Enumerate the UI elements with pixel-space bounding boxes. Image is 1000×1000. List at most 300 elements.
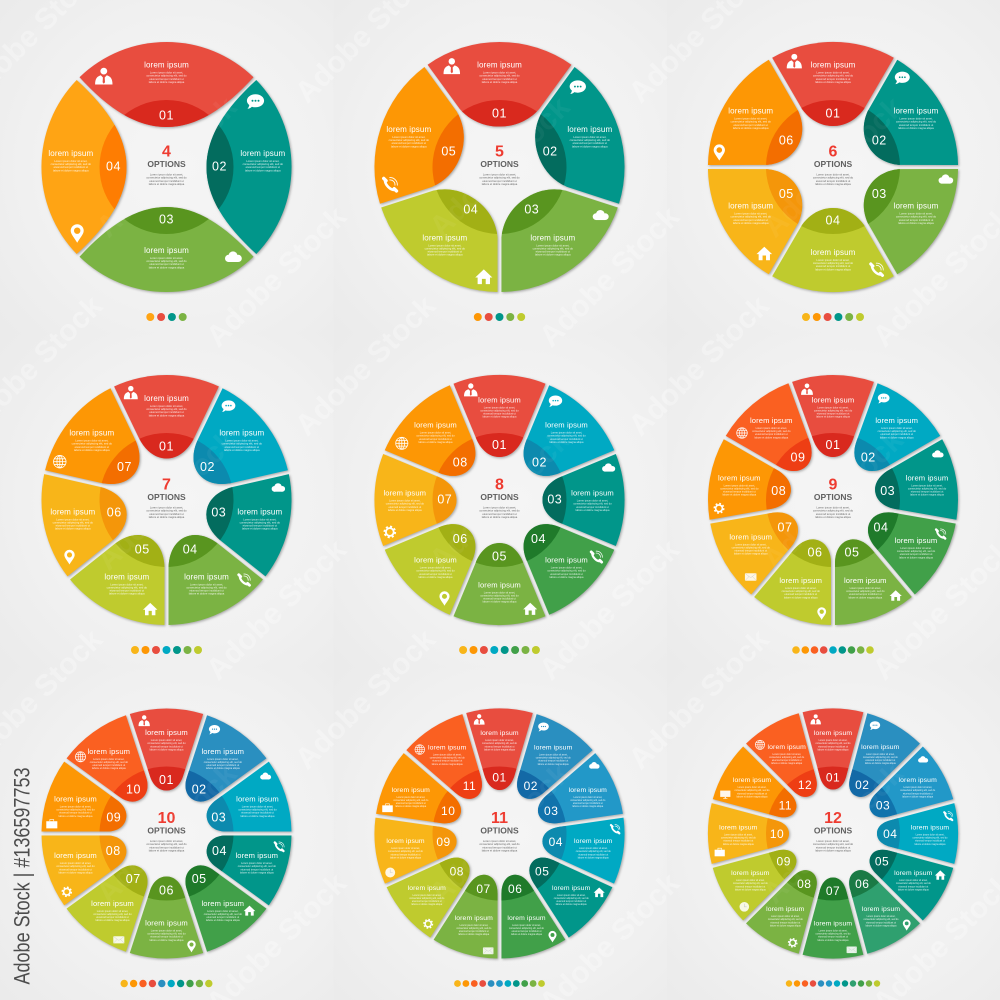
segment 02: consectetur adipiscing elit, sed do [570,138,610,142]
icon: cloud [272,483,285,492]
center heading [479,144,520,186]
segment 02: labore et dolore magna aliqua [880,435,914,439]
center heading: labore et dolore magna aliqua [149,182,185,186]
segment 05: lorem ipsum [552,885,591,892]
segment 11: consectetur adipiscing elit, sed do [430,757,465,760]
segment 06: Lorem ipsum dolor sit amet, [151,928,182,932]
segment 11: consectetur adipiscing elit, sed do [735,789,770,792]
center heading: eiusmod tempor incididunt ut [816,179,850,183]
panel: 12 options [708,708,958,987]
segment 04: lorem ipsum [911,824,949,832]
segment 07: lorem ipsum [69,429,114,438]
segment 04 [381,188,500,294]
segment 05: eiusmod tempor incididunt ut [207,915,239,919]
segment 03: 03 [524,203,539,217]
segment 01 [428,42,571,126]
icon: chat [549,396,562,407]
icon: user [124,386,138,399]
segment 09: consectetur adipiscing elit, sed do [56,808,95,812]
segment 02: 02 [532,455,547,469]
panel: 8 options [374,375,625,654]
segment 05: labore et dolore magna aliqua [848,595,883,599]
segment 02: labore et dolore magna aliqua [572,144,608,148]
segment 05: eiusmod tempor incididunt ut [483,597,516,601]
segment 07: labore et dolore magna aliqua [734,552,768,556]
segment 04: Lorem ipsum dolor sit amet, [916,834,945,836]
segment 04: labore et dolore magna aliqua [240,870,274,874]
segment 01: Lorem ipsum dolor sit amet, [485,739,514,742]
segment 01: labore et dolore magna aliqua [816,415,850,419]
segment 09: 09 [777,854,791,868]
segment 05: labore et dolore magna aliqua [556,903,587,906]
segment 04: lorem ipsum [545,556,588,565]
icon: home [143,603,157,615]
segment 01 [803,708,863,790]
icon: chat [247,94,264,109]
segment 09: Lorem ipsum dolor sit amet, [60,804,91,808]
segment 01: labore et dolore magna aliqua [484,748,516,751]
segment 03: labore et dolore magna aliqua [149,265,185,269]
segment 12 [744,710,837,811]
icon: gear [62,887,71,896]
segment 07: 07 [117,460,132,474]
icon: cloud [932,450,944,457]
segment 02: consectetur adipiscing elit, sed do [863,756,898,759]
segment 04: consectetur adipiscing elit, sed do [913,837,948,840]
icon: user [95,68,112,84]
segment 05: consectetur adipiscing elit, sed do [554,897,589,900]
segment 11: eiusmod tempor incididunt ut [737,792,767,795]
center heading [146,810,187,853]
segment 07: 07 [778,520,792,534]
segment 03: 03 [211,810,226,824]
segment 09: consectetur adipiscing elit, sed do [752,429,791,433]
segment 08: Lorem ipsum dolor sit amet, [724,483,755,487]
segment 02: labore et dolore magna aliqua [206,766,240,770]
segment 01: Lorem ipsum dolor sit amet, [817,405,849,409]
segment 01: 01 [492,770,507,784]
segment 05: lorem ipsum [478,580,521,589]
icon: user [787,54,802,68]
segment 09 [710,829,810,922]
segment 07: lorem ipsum [91,899,134,908]
segment 03: labore et dolore magna aliqua [572,805,604,808]
panel: 11 options [371,708,628,987]
icon: home [475,269,492,284]
center heading: eiusmod tempor incididunt ut [149,179,184,183]
segment 06 [130,876,203,959]
icon: phone [384,178,397,191]
segment 01: consectetur adipiscing elit, sed do [146,74,187,78]
segment 07: lorem ipsum [729,532,772,541]
segment 02: lorem ipsum [875,416,918,425]
segment 06: labore et dolore magna aliqua [419,575,453,579]
segment 04 [523,524,616,616]
segment 05: eiusmod tempor incididunt ut [898,885,929,888]
icon: pin [548,931,557,942]
legend dots [474,313,525,321]
segment 04: Lorem ipsum dolor sit amet, [190,582,223,586]
segment 06: 06 [453,532,468,546]
segment 04: Lorem ipsum dolor sit amet, [241,861,273,865]
segment 04: eiusmod tempor incididunt ut [189,589,224,593]
segment 06 [41,474,129,578]
segment 08: lorem ipsum [414,421,457,430]
segment 06: labore et dolore magna aliqua [511,933,543,936]
watermark background: Adobe Stock [623,289,776,442]
center heading: Lorem ipsum dolor sit amet, [150,839,183,843]
segment 06: eiusmod tempor incididunt ut [56,524,90,528]
segment 05: Lorem ipsum dolor sit amet, [850,586,881,590]
segment 02: labore et dolore magna aliqua [224,448,260,452]
segment 01: Lorem ipsum dolor sit amet, [150,404,183,408]
icon: user [464,383,478,396]
panel: 9 options [703,375,963,654]
segment 08 [36,812,137,907]
segment 03 [525,751,627,846]
icon: cloud [939,174,953,184]
segment 01: eiusmod tempor incididunt ut [149,410,184,414]
segment 01 [114,375,219,458]
icon: chat [570,80,586,94]
icon: chat [222,400,235,412]
segment 04: Lorem ipsum dolor sit amet, [54,159,88,163]
segment 01 [454,375,546,457]
segment 02: Lorem ipsum dolor sit amet, [246,159,280,163]
segment 10: 10 [770,827,784,841]
segment 01: consectetur adipiscing elit, sed do [479,74,520,78]
icon: pin [714,144,725,161]
segment 03: lorem ipsum [236,794,279,804]
segment 04: consectetur adipiscing elit, sed do [238,864,276,868]
segment 11: lorem ipsum [733,777,771,784]
segment 06: Lorem ipsum dolor sit amet, [512,924,541,927]
center heading: Lorem ipsum dolor sit amet, [816,506,850,510]
icon: phone [591,551,602,562]
segment 04: lorem ipsum [184,572,229,581]
segment 10 [63,711,171,820]
segment 08: consectetur adipiscing elit, sed do [416,434,455,438]
icon: pin [817,607,826,620]
center heading [146,144,187,186]
segment 07: 07 [126,872,141,886]
segment 02: lorem ipsum [894,107,939,116]
segment 01: Lorem ipsum dolor sit amet, [819,739,848,742]
segment 03: 03 [544,804,558,818]
center heading: 5 [495,144,504,161]
segment 05: labore et dolore magna aliqua [733,221,769,225]
segment 03: labore et dolore magna aliqua [576,508,610,512]
segment 04: labore et dolore magna aliqua [915,843,946,846]
segment 12: labore et dolore magna aliqua [771,762,803,765]
segment 08: 08 [450,864,464,878]
segment 03: 03 [211,505,226,519]
segment 07: eiusmod tempor incididunt ut [734,548,767,552]
segment 07: Lorem ipsum dolor sit amet, [735,542,767,546]
segment 02 [523,385,616,478]
legend dots [146,313,187,321]
segment 03: lorem ipsum [894,202,939,211]
center heading: Lorem ipsum dolor sit amet, [483,172,516,176]
segment 08: labore et dolore magna aliqua [59,870,93,874]
segment 12: lorem ipsum [768,744,806,751]
segment 09: lorem ipsum [750,416,793,425]
icon: phone [871,263,883,275]
watermark overlay: Adobe Stock [757,757,910,910]
segment 07: lorem ipsum [455,915,493,922]
watermark background: Adobe Stock [200,533,353,686]
segment 08: 08 [106,844,121,858]
icon: cloud [260,773,271,779]
segment 06 [384,524,478,616]
segment 05: consectetur adipiscing elit, sed do [480,593,519,597]
center heading: labore et dolore magna aliqua [482,515,518,519]
watermark overlay: Adobe Stock [757,424,910,577]
segment 11: Lorem ipsum dolor sit amet, [738,786,767,789]
segment 07: consectetur adipiscing elit, sed do [386,502,424,506]
segment 04: eiusmod tempor incididunt ut [900,552,933,556]
segment 07: labore et dolore magna aliqua [818,939,849,942]
segment 09 [721,378,837,493]
segment 08: 08 [797,877,811,891]
center heading: consectetur adipiscing elit, sed do [813,176,854,180]
segment 10: 10 [126,782,141,796]
segment 04: 04 [874,520,888,534]
segment 02: Lorem ipsum dolor sit amet, [866,753,895,756]
segment 03: consectetur adipiscing elit, sed do [570,799,606,802]
segment 01: Lorem ipsum dolor sit amet, [816,71,850,75]
icon: home [890,590,902,601]
segment 05 [70,534,167,628]
segment 09: labore et dolore magna aliqua [754,435,789,439]
segment 03: consectetur adipiscing elit, sed do [908,486,947,490]
center heading: 12 [824,810,842,827]
segment 06: 06 [855,877,869,891]
segment 05 [511,837,616,941]
segment 02: Lorem ipsum dolor sit amet, [207,757,239,761]
segment 04: eiusmod tempor incididunt ut [578,853,608,856]
segment 01: 01 [159,108,174,122]
segment 09 [36,760,137,855]
segment 07: eiusmod tempor incididunt ut [389,505,421,509]
segment 02: eiusmod tempor incididunt ut [899,123,933,127]
segment 05: 05 [845,546,859,560]
segment 05: labore et dolore magna aliqua [483,600,517,604]
center heading: eiusmod tempor incididunt ut [816,512,850,516]
center heading: consectetur adipiscing elit, sed do [813,509,854,513]
segment 11 [404,710,504,815]
segment 03: lorem ipsum [144,246,189,255]
segment 02: lorem ipsum [240,149,285,158]
segment 09: lorem ipsum [731,870,770,877]
center heading: OPTIONS [480,159,519,169]
segment 10: eiusmod tempor incididunt ut [396,802,426,805]
segment 04: eiusmod tempor incididunt ut [550,572,583,576]
segment 07: labore et dolore magna aliqua [388,508,422,512]
segment 02: 02 [192,782,207,796]
segment 03: lorem ipsum [899,777,937,784]
segment 01: lorem ipsum [812,395,854,404]
icon: phone [611,825,620,833]
segment 02: 02 [200,460,215,474]
segment 05: 05 [192,872,207,886]
icon: chat [209,725,220,734]
segment 04 [168,534,264,628]
center heading: 10 [158,810,176,827]
segment 07: Lorem ipsum dolor sit amet, [819,930,848,932]
segment 02: consectetur adipiscing elit, sed do [204,760,242,764]
center heading: Lorem ipsum dolor sit amet, [483,506,516,510]
segment 02: labore et dolore magna aliqua [245,168,281,172]
segment 08: Lorem ipsum dolor sit amet, [771,915,800,918]
center heading: labore et dolore magna aliqua [815,515,851,519]
segment 03: consectetur adipiscing elit, sed do [240,520,280,524]
icon: clock [740,902,749,912]
watermark background: Adobe Stock [289,289,442,442]
segment 07: eiusmod tempor incididunt ut [818,936,848,939]
segment 05 [374,67,466,206]
segment 02: lorem ipsum [567,125,612,134]
center heading: OPTIONS [814,492,852,502]
segment 02 [829,710,922,811]
segment 03: 03 [872,187,887,201]
segment 05: lorem ipsum [894,870,933,877]
segment 03: Lorem ipsum dolor sit amet, [150,256,183,260]
icon: phone [239,574,250,585]
segment 01: 01 [159,440,174,454]
center heading: OPTIONS [147,159,186,169]
segment 01: labore et dolore magna aliqua [483,415,517,419]
segment 04: labore et dolore magna aliqua [427,253,463,257]
segment 08: lorem ipsum [718,473,761,482]
segment 01: labore et dolore magna aliqua [482,80,518,84]
segment 07 [374,454,456,546]
segment 03: Lorem ipsum dolor sit amet, [242,804,273,808]
center heading: Lorem ipsum dolor sit amet, [816,839,850,843]
segment 04: Lorem ipsum dolor sit amet, [551,566,582,570]
icon: gear [788,939,797,947]
segment 03: consectetur adipiscing elit, sed do [900,789,936,792]
segment 07: Lorem ipsum dolor sit amet, [75,439,109,443]
segment 06: consectetur adipiscing elit, sed do [416,569,455,573]
icon: home [244,906,255,916]
icon: globe [75,752,86,762]
center heading: consectetur adipiscing elit, sed do [479,509,520,513]
segment 07: eiusmod tempor incididunt ut [75,445,109,449]
segment 08: lorem ipsum [408,885,446,892]
segment 06: lorem ipsum [728,107,773,116]
icon: mail [847,946,857,953]
center heading: eiusmod tempor incididunt ut [482,179,517,183]
segment 11: Lorem ipsum dolor sit amet, [433,754,462,756]
watermark background: Adobe Stock [200,200,353,353]
segment 04: Lorem ipsum dolor sit amet, [900,546,932,550]
segment 05: lorem ipsum [104,572,149,581]
segment 02: labore et dolore magna aliqua [550,440,584,444]
segment 06: consectetur adipiscing elit, sed do [864,918,899,921]
icon: home [594,888,605,897]
segment 05: lorem ipsum [386,125,431,134]
segment 08: Lorem ipsum dolor sit amet, [60,861,91,865]
segment 03 [501,188,620,294]
segment 01: 01 [826,438,840,452]
center heading: labore et dolore magna aliqua [482,849,518,853]
segment 04 [772,208,894,292]
segment 07: consectetur adipiscing elit, sed do [72,442,112,446]
icon: globe [53,455,66,468]
segment 09: consectetur adipiscing elit, sed do [733,882,768,885]
icon: chat [870,721,880,730]
segment 08 [703,438,798,533]
segment 02: lorem ipsum [219,429,264,438]
segment 03: eiusmod tempor incididunt ut [573,802,603,805]
segment 07: 07 [476,882,491,896]
segment 04: lorem ipsum [422,233,467,242]
icon: globe [415,745,425,754]
segment 01: eiusmod tempor incididunt ut [482,77,517,81]
segment 03: eiusmod tempor incididunt ut [576,505,609,509]
segment 03: labore et dolore magna aliqua [241,814,275,818]
segment 05: consectetur adipiscing elit, sed do [389,138,429,142]
segment 06: eiusmod tempor incididunt ut [784,592,817,596]
watermark background: Adobe Stock [533,200,686,353]
segment 01: Lorem ipsum dolor sit amet, [484,405,515,409]
segment 06: lorem ipsum [862,906,900,913]
segment 10 [708,803,789,864]
segment 04: 04 [106,159,121,173]
segment 01: labore et dolore magna aliqua [149,80,185,84]
segment 01: labore et dolore magna aliqua [150,747,184,751]
segment 03: Lorem ipsum dolor sit amet, [899,212,933,216]
segment 05: labore et dolore magna aliqua [391,144,427,148]
segment 10: lorem ipsum [392,787,430,794]
segment 10: labore et dolore magna aliqua [723,843,754,846]
segment 10: consectetur adipiscing elit, sed do [721,837,756,840]
segment 05: consectetur adipiscing elit, sed do [846,589,885,593]
segment 07 [63,847,171,956]
segment 02: lorem ipsum [201,747,244,756]
segment 05: 05 [875,854,889,868]
segment 06: labore et dolore magna aliqua [55,527,91,531]
segment 05: consectetur adipiscing elit, sed do [107,585,147,589]
segment 07: Lorem ipsum dolor sit amet, [459,924,489,927]
segment 04: eiusmod tempor incididunt ut [54,165,88,169]
icon: globe [737,428,747,438]
segment 03: Lorem ipsum dolor sit amet, [903,786,932,789]
segment 02: lorem ipsum [861,744,900,751]
segment 04: 04 [183,542,198,556]
icon: phone [936,529,946,538]
segment 10 [372,751,474,846]
segment 02: labore et dolore magna aliqua [898,126,934,130]
watermark overlay: Adobe Stock [423,424,577,577]
segment 05: Lorem ipsum dolor sit amet, [557,894,586,897]
segment 02: 02 [212,159,227,173]
legend dots [786,980,880,987]
segment 03: 03 [159,213,174,227]
segment 08: eiusmod tempor incididunt ut [723,489,756,493]
segment 12: eiusmod tempor incididunt ut [772,759,802,762]
segment 01 [466,708,533,790]
segment 09: Lorem ipsum dolor sit amet, [736,879,765,882]
icon: pin [71,224,84,243]
center heading: consectetur adipiscing elit, sed do [146,842,187,846]
segment 01: consectetur adipiscing elit, sed do [816,742,851,745]
center heading: 4 [162,144,171,161]
segment 03: Lorem ipsum dolor sit amet, [911,483,943,487]
segment 04 [538,807,628,884]
segment 03: 03 [876,798,890,812]
